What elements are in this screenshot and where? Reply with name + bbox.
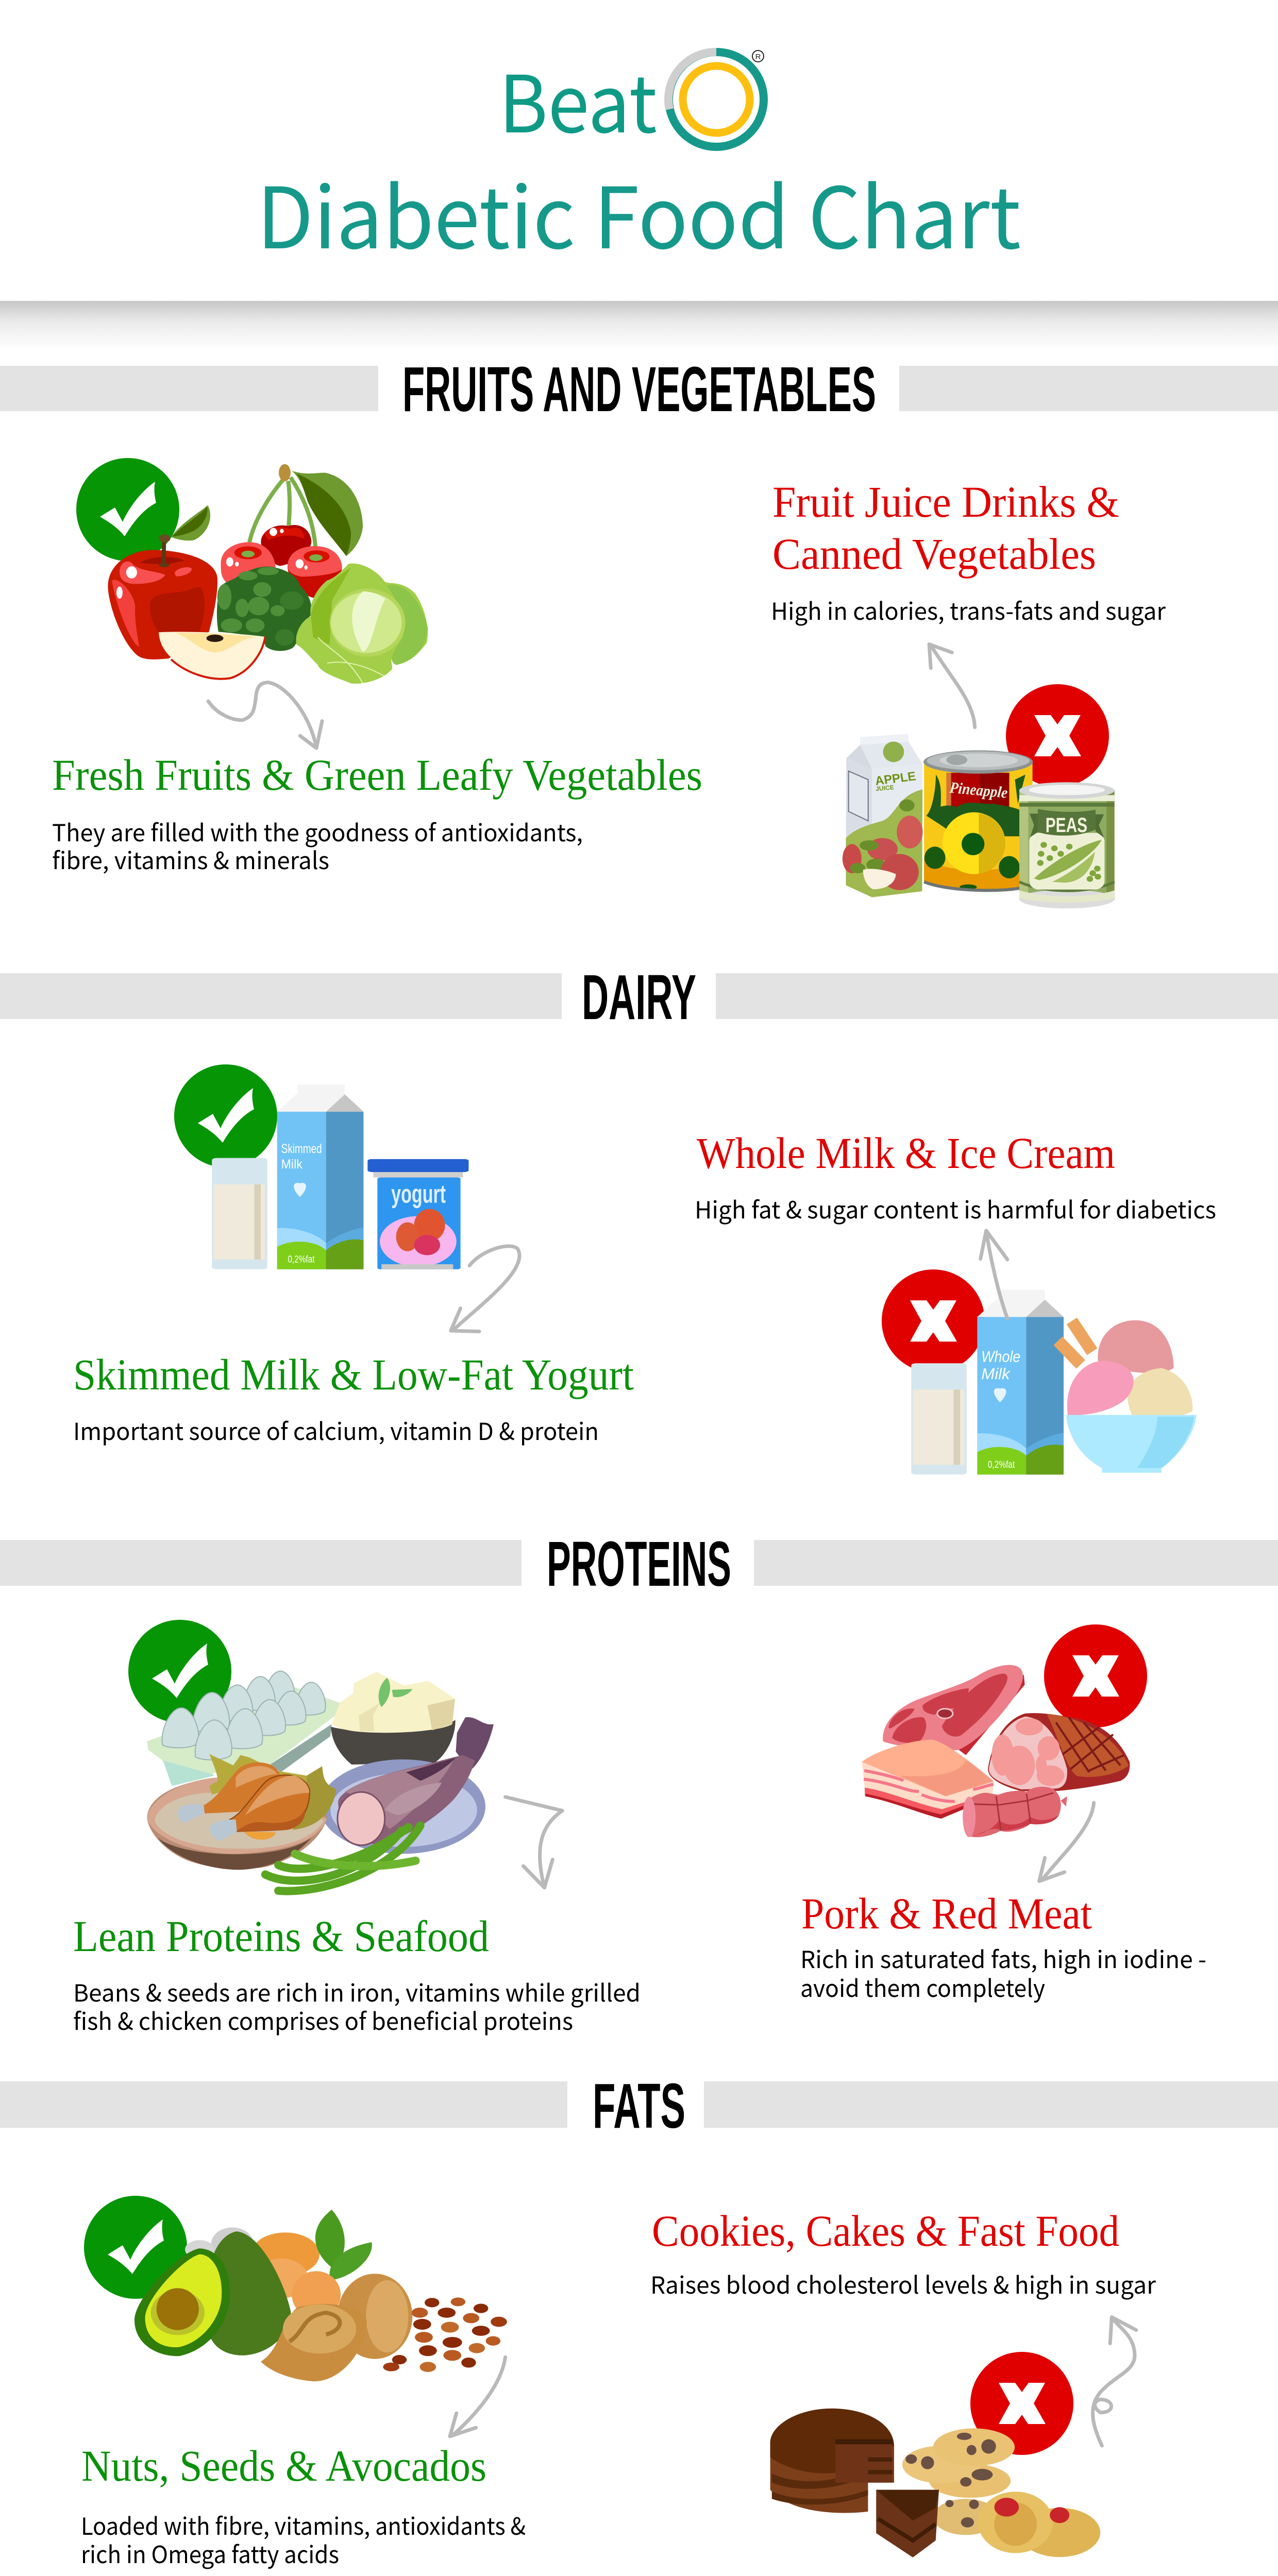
arrow [1039,1803,1094,1881]
illustration: eggs, tofu, chicken, fish, beans [147,1671,494,1891]
illustration: juice carton and cans: Pineapple [948,779,1008,802]
description: good foods [81,2508,526,2570]
section: fats [0,2071,1278,2570]
arrow [1093,2317,1136,2446]
cross badge [1044,1624,1147,1727]
cross badge [882,1269,985,1372]
description: bad foods [800,1941,1206,2004]
section: fruits and vegetables [0,354,1278,908]
description: good foods: They are filled with the goodness of antioxidants, [52,815,583,849]
description: bad foods: High in calories, trans-fats and sugar [771,593,1166,627]
illustration: apple, cherries, broccoli, cabbage [108,464,428,684]
heading: bad foods: Pork & Red Meat [801,1889,1092,1938]
heading: good foods: Nuts, Seeds & Avocados [81,2441,486,2490]
arrow [929,644,975,727]
section heading bar [0,354,1278,425]
illustration: avocado, nuts, seeds [134,2210,507,2381]
section heading bar: FATS [593,2071,685,2142]
arrow [506,1797,562,1888]
illustration: whole milk and ice cream: 0,2%fat [988,1459,1015,1470]
check badge [128,1620,231,1723]
heading: bad foods: Fruit Juice Drinks & [772,477,1119,527]
heading: bad foods: Whole Milk & Ice Cream [697,1128,1115,1178]
heading: good foods: Lean Proteins & Seafood [73,1911,489,1961]
description: good foods [73,1975,641,2037]
description: good foods: fibre, vitamins & minerals [52,842,329,876]
heading: good foods: Fresh Fruits & Green Leafy Vegetables [52,750,702,800]
section heading bar: PROTEINS [547,1529,731,1600]
arrow [208,683,322,748]
description: good foods [52,815,583,876]
illustration: milk glass, skimmed milk carton, yogurt [212,1084,468,1269]
illustration: whole milk and ice cream: Milk [981,1365,1011,1383]
section: proteins [0,1529,1278,2037]
logo: BeatO: R [755,53,761,61]
description: good foods: Loaded with fibre, vitamins, antioxidants & [81,2508,526,2542]
description: good foods: rich in Omega fatty acids [81,2536,339,2570]
heading: bad foods: Cookies, Cakes & Fast Food [652,2206,1119,2256]
logo: BeatO [499,42,764,156]
section: dairy: yogurt [391,1179,446,1208]
description: good foods: fish & chicken comprises of beneficial proteins [73,2003,573,2037]
check badge [84,2196,187,2299]
cross badge [1006,684,1109,787]
section heading bar: FRUITS AND VEGETABLES [402,354,876,425]
arrow [981,1231,1007,1318]
header shadow band [0,301,1278,350]
illustration: juice carton and cans: APPLE [874,769,917,788]
section: dairy [0,962,1278,1475]
heading: bad foods [772,477,1119,579]
logo: BeatO: Beat [499,42,657,156]
illustration: milk glass, skimmed milk carton, yogurt: Skimmed [281,1141,322,1156]
description: bad foods: Rich in saturated fats, high in iodine - [800,1941,1206,1975]
description: bad foods: avoid them completely [800,1970,1045,2004]
header [0,42,1278,350]
illustration: cake and cookies [770,2409,1100,2557]
illustration: juice carton and cans: JUICE [875,784,895,792]
description: bad foods: Raises blood cholesterol levels & high in sugar [650,2267,1156,2301]
section heading bar [0,962,1278,1033]
illustration: juice carton and cans [843,734,1115,908]
cross badge [970,2352,1073,2455]
illustration: whole milk and ice cream: Whole [981,1348,1020,1365]
description: good foods: Important source of calcium, vitamin D & protein [73,1413,599,1447]
section heading bar [0,1529,1278,1600]
illustration: juice carton and cans: PEAS [1046,814,1087,836]
illustration: milk glass, skimmed milk carton, yogurt: 0,2%fat [288,1253,315,1265]
section heading bar: DAIRY [582,962,696,1033]
arrow [451,1246,519,1331]
section heading bar [0,2071,1278,2142]
check badge [174,1064,277,1167]
illustration: milk glass, skimmed milk carton, yogurt: Milk [281,1157,302,1172]
description: good foods: Beans & seeds are rich in iron, vitamins while grilled [73,1975,641,2009]
check badge [76,458,179,561]
title: Diabetic Food Chart [257,151,1021,273]
arrow [450,2357,506,2436]
heading: good foods: Skimmed Milk & Low-Fat Yogurt [73,1350,634,1399]
heading: bad foods: Canned Vegetables [772,529,1096,579]
illustration: red meat [862,1665,1130,1837]
illustration: whole milk and ice cream [911,1290,1197,1475]
description: bad foods: High fat & sugar content is harmful for diabetics [695,1192,1216,1226]
